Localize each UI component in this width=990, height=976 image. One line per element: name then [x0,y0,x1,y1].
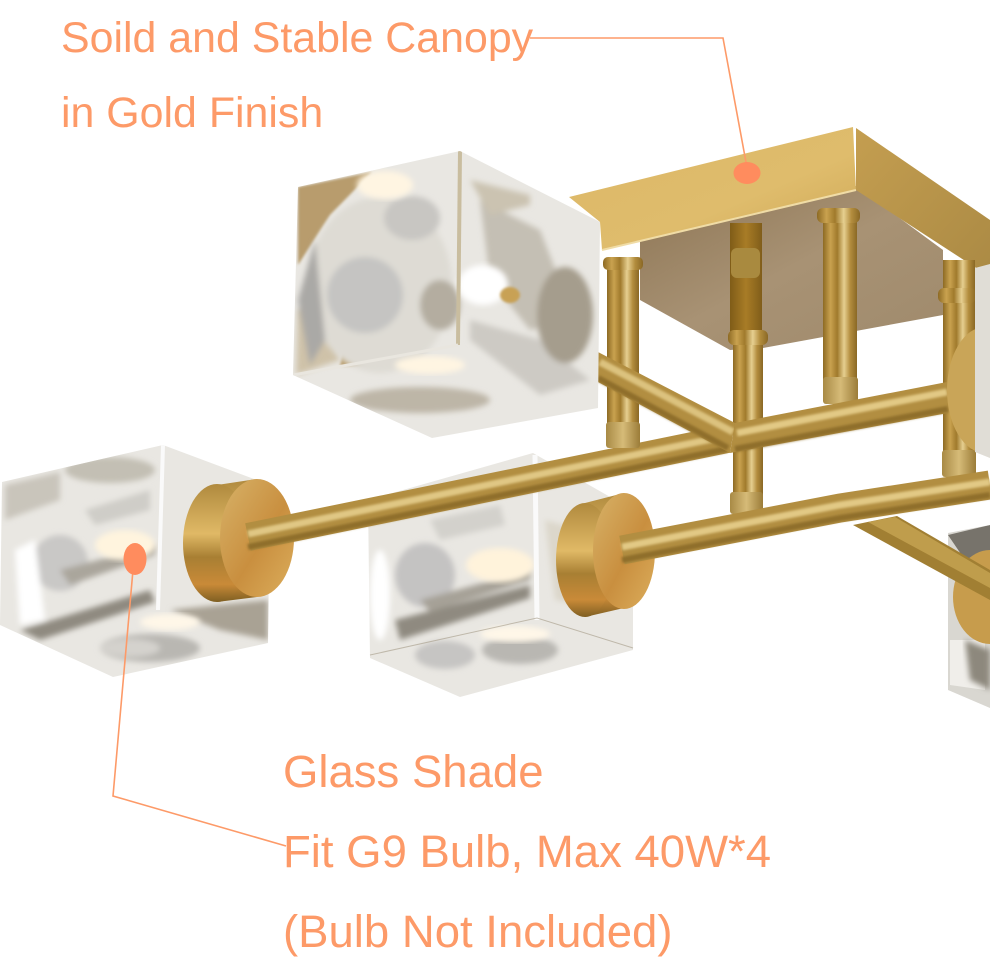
mounting disc: right lower, cropped [953,550,990,644]
mounting disc: left [183,479,294,602]
mounting disc: right upper, cropped [947,327,990,453]
heading: glass shade label: Fit G9 Bulb, Max 40W*4 [283,826,771,877]
crossed arms at junction [598,352,948,453]
canopy [569,127,990,350]
heading: glass shade label [283,746,771,957]
long brass arm [248,436,727,547]
mounting disc: centre [556,493,655,617]
callout: canopy leader line [530,38,760,184]
heading: canopy label: in Gold Finish [61,89,323,137]
crystal shade: left [0,445,270,677]
crystal shade: right lower, cropped [948,525,990,708]
support posts [603,208,976,514]
crystal shade: top centre [293,151,600,438]
heading: canopy label [61,14,534,137]
heading: canopy label: Soild and Stable Canopy [61,14,534,62]
crystal shade: right upper, cropped [975,264,990,458]
crystal shade: centre [368,453,633,697]
heading: glass shade label: Glass Shade [283,746,544,797]
lower diagonal arm [853,516,990,600]
short brass arm [622,482,990,560]
heading: glass shade label: (Bulb Not Included) [283,906,672,957]
callout: glass shade leader line [113,543,286,846]
